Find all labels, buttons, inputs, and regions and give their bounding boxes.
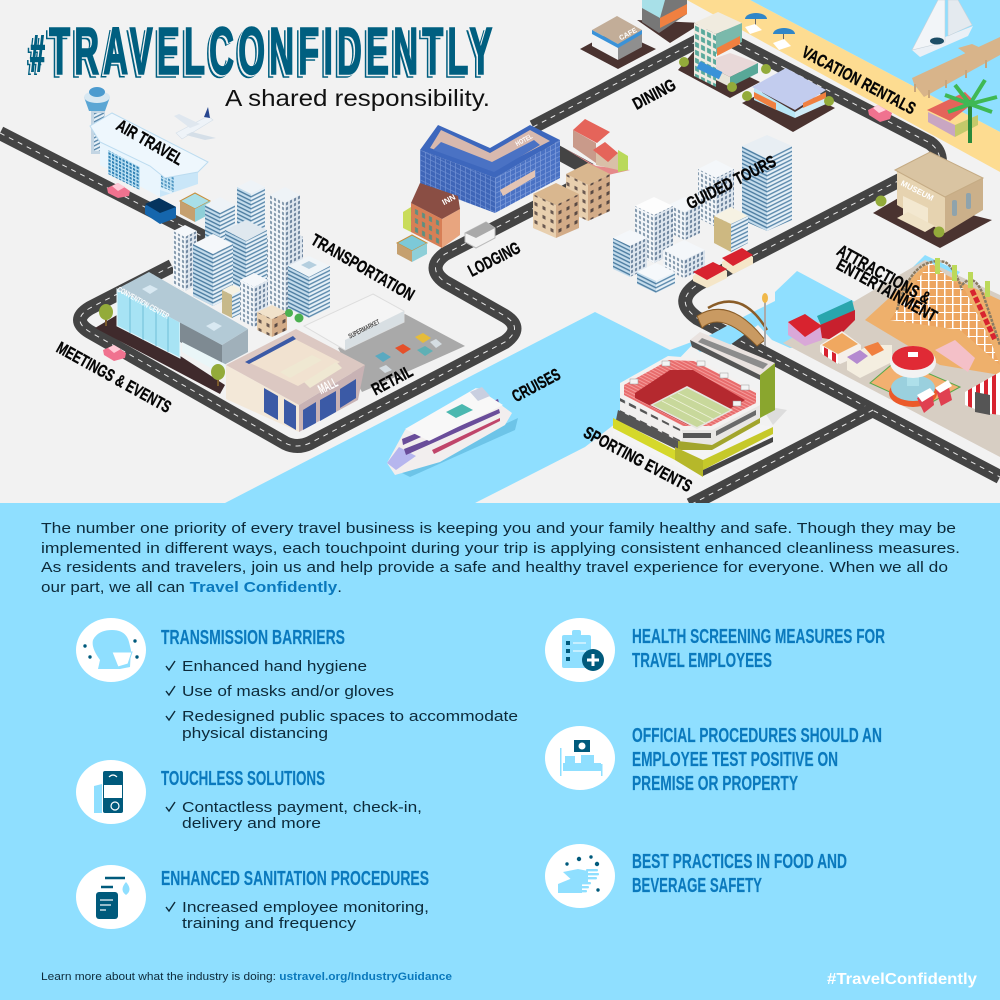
check item xyxy=(166,899,429,932)
label: attractions: ATTRACTIONS & xyxy=(834,241,934,308)
cruise ship xyxy=(387,387,518,477)
label: meetings and events: MEETINGS & EVENTS xyxy=(53,338,174,417)
beach hotel xyxy=(742,68,835,132)
red house xyxy=(564,119,630,175)
inn right xyxy=(442,209,460,248)
bow xyxy=(387,447,416,470)
pink car on loop road xyxy=(103,345,126,361)
tower E xyxy=(225,220,267,290)
bridge xyxy=(697,293,768,346)
rounded block xyxy=(663,240,705,278)
check item: Contactless payment, check-in, xyxy=(182,799,422,816)
air terminal xyxy=(84,87,216,197)
heading xyxy=(632,725,882,795)
airplane xyxy=(174,107,216,140)
label: retail: RETAIL xyxy=(368,362,416,399)
water: harbour lower xyxy=(400,340,697,503)
dark lower wall xyxy=(616,410,678,450)
yellow band right xyxy=(703,427,773,470)
label: lodging: LODGING xyxy=(465,238,523,281)
front tan building xyxy=(533,183,579,238)
tall tower xyxy=(267,187,303,312)
lamp post xyxy=(762,293,768,346)
check item 3: physical distancing xyxy=(182,725,328,742)
tower C xyxy=(205,197,235,247)
parked cars xyxy=(375,333,442,373)
supermarket front xyxy=(345,311,404,350)
house annex roof xyxy=(593,142,618,162)
intro paragraph: As residents and travelers, join us and help provide a safe and healthy travel experience for everyone. When we all do xyxy=(41,559,948,576)
roof xyxy=(117,272,248,345)
field xyxy=(653,388,730,427)
heading: TOUCHLESS SOLUTIONS xyxy=(161,768,325,790)
left wall xyxy=(226,365,299,432)
wall window strip xyxy=(683,433,711,438)
hotel left wall xyxy=(420,150,495,213)
lower bowl xyxy=(635,370,745,425)
check item: Increased employee monitoring, xyxy=(182,899,429,916)
section: touchless solutions xyxy=(76,760,422,832)
mid block xyxy=(670,197,700,240)
funnel xyxy=(470,387,490,401)
hull xyxy=(387,388,512,475)
icon: washing hands xyxy=(545,844,615,908)
tower A xyxy=(173,225,197,291)
tower D xyxy=(237,180,265,240)
heading: ENHANCED SANITATION PROCEDURES xyxy=(161,868,429,890)
inn xyxy=(403,183,460,248)
flat block xyxy=(637,263,675,293)
roof xyxy=(226,329,365,405)
water: ocean top right xyxy=(750,0,1000,132)
inn: INN xyxy=(441,192,457,207)
hotel xyxy=(420,125,560,213)
beach xyxy=(687,0,1000,172)
blue bus xyxy=(145,198,176,224)
icon: sanitizer xyxy=(76,865,146,929)
museum xyxy=(873,152,992,248)
blue windows xyxy=(264,379,356,430)
museum left wall xyxy=(897,170,945,233)
sand area xyxy=(865,265,1000,375)
title: TRAVELCONFIDENTLY xyxy=(46,18,493,92)
mall sign: MALL xyxy=(315,374,340,397)
white outer wall left xyxy=(620,398,682,443)
guided tours buildings xyxy=(613,135,792,293)
water: harbour xyxy=(225,312,697,503)
inn side xyxy=(403,207,411,232)
restaurant awning xyxy=(717,36,740,56)
glass mullions xyxy=(130,296,168,352)
title: # xyxy=(28,25,47,84)
wake xyxy=(400,418,518,477)
icon: clipboard xyxy=(545,618,615,682)
light towers xyxy=(630,361,749,406)
intro paragraph xyxy=(41,520,960,596)
carts xyxy=(917,380,952,413)
shop top xyxy=(637,0,702,43)
terminal building xyxy=(90,113,208,197)
green block xyxy=(675,447,703,477)
white outer wall right xyxy=(682,405,760,445)
tour buses xyxy=(693,248,753,288)
pink car on coast road xyxy=(868,105,892,122)
striped tent xyxy=(965,372,1000,415)
tan rounded buildings xyxy=(533,163,610,238)
section: official procedures xyxy=(545,725,882,795)
house plinth xyxy=(564,148,630,175)
house wall xyxy=(573,130,596,163)
red deck stripe xyxy=(432,418,500,454)
grey face xyxy=(180,322,222,364)
footer hashtag: #TravelConfidently xyxy=(827,971,977,988)
icon: payment terminal xyxy=(76,760,146,824)
label: dining: DINING xyxy=(629,75,679,114)
heading xyxy=(632,626,885,672)
roof vents xyxy=(142,285,222,331)
tower H xyxy=(222,285,242,318)
coaster rails xyxy=(897,261,1000,345)
tower F xyxy=(288,256,330,318)
section: enhanced sanitation procedures xyxy=(76,865,429,932)
restaurant tower xyxy=(694,12,742,87)
beach house xyxy=(927,92,978,137)
subtitle: A shared responsibility. xyxy=(225,85,490,111)
pool pavilion xyxy=(397,235,427,262)
section: food safety xyxy=(545,844,847,908)
coaster lattice xyxy=(890,262,1000,365)
back tan building xyxy=(566,163,610,221)
labels xyxy=(53,42,941,496)
corner block xyxy=(613,230,647,277)
heading: TRANSMISSION BARRIERS xyxy=(161,627,345,649)
top deck xyxy=(405,388,503,441)
house garden xyxy=(618,150,628,172)
stadium xyxy=(613,332,787,480)
supermarket xyxy=(304,294,404,350)
stadium base xyxy=(613,410,773,480)
pink booths xyxy=(935,340,975,372)
check item 1: Enhanced hand hygiene xyxy=(182,658,367,675)
cafe: CAFE xyxy=(618,27,639,42)
glass pavilion xyxy=(180,193,210,222)
restaurant sign xyxy=(696,61,722,79)
white tower xyxy=(635,197,673,263)
city skyline xyxy=(173,180,330,337)
tower G xyxy=(240,273,268,327)
convention sign: CONVENTION CENTER xyxy=(116,285,171,321)
restaurant lower wing xyxy=(702,53,758,87)
convention center xyxy=(95,272,248,394)
plaza xyxy=(95,315,225,394)
tree right xyxy=(211,364,225,386)
heading: BEVERAGE SAFETY xyxy=(632,875,762,897)
cafe xyxy=(580,16,656,69)
title: # xyxy=(30,23,49,82)
footer link text: Learn more about what the industry is doing: ustravel.org/IndustryGuidance xyxy=(41,971,452,983)
title: TRAVELCONFIDENTLY xyxy=(47,17,495,91)
check item 3: Redesigned public spaces to accommodate xyxy=(182,708,518,725)
cafe building xyxy=(592,32,618,60)
carousel xyxy=(889,346,937,407)
upper seats xyxy=(624,360,756,426)
field border xyxy=(650,386,733,429)
museum portico xyxy=(903,196,928,230)
museum right wall xyxy=(945,178,983,233)
green tower xyxy=(760,363,775,418)
orange stand xyxy=(820,331,861,364)
hotel sign: HOTEL xyxy=(515,133,534,148)
mall xyxy=(226,329,365,432)
roads xyxy=(0,32,1000,505)
label: sporting events: SPORTING EVENTS xyxy=(580,423,695,496)
teal bus ride xyxy=(817,300,855,328)
museum arched windows xyxy=(952,193,971,216)
palm trees xyxy=(945,80,997,143)
right wall windows xyxy=(716,410,756,436)
glass face xyxy=(117,289,180,358)
restaurant xyxy=(678,12,771,98)
sailboat xyxy=(912,0,973,57)
section: transmission barriers xyxy=(76,618,518,742)
inn front xyxy=(411,203,442,248)
pink car on airport road xyxy=(107,183,130,198)
check item 2: Use of masks and/or gloves xyxy=(182,683,394,700)
end face xyxy=(222,329,248,366)
pier xyxy=(912,37,1000,98)
lower white bay xyxy=(182,342,225,376)
right lower green xyxy=(678,418,760,450)
water: channel under bridge xyxy=(692,255,960,352)
heading: TRAVEL EMPLOYEES xyxy=(632,650,772,672)
check item: training and frequency xyxy=(182,915,357,932)
ring base xyxy=(620,356,760,430)
house main roof xyxy=(573,119,610,143)
hotel right wall xyxy=(495,140,560,213)
title: # xyxy=(27,26,46,85)
heading: EMPLOYEE TEST POSITIVE ON xyxy=(632,749,838,771)
intro paragraph: our part, we all can Travel Confidently . xyxy=(41,579,342,596)
right wall xyxy=(299,365,365,432)
check item: delivery and more xyxy=(182,815,321,832)
heading xyxy=(632,851,847,897)
park ground xyxy=(783,260,1000,457)
section: health screening xyxy=(545,618,885,682)
check item 3 xyxy=(166,708,518,742)
label: cruises: CRUISES xyxy=(509,365,564,406)
scoreboard roof xyxy=(690,332,775,380)
label: transportation: TRANSPORTATION xyxy=(308,230,418,305)
label: entertainment: ENTERTAINMENT xyxy=(833,255,941,326)
intro paragraph: The number one priority of every travel business is keeping you and your family healthy and safe. Though they may be xyxy=(41,520,956,537)
red food stand xyxy=(788,315,822,346)
stadium shadow xyxy=(760,405,787,425)
museum steps xyxy=(897,212,935,232)
museum roof xyxy=(895,152,983,197)
check item xyxy=(166,799,422,832)
info panel background xyxy=(0,503,1000,1000)
tree left xyxy=(99,304,113,326)
hotel balcony xyxy=(500,170,535,196)
heading: HEALTH SCREENING MEASURES FOR xyxy=(632,626,885,648)
heading: OFFICIAL PROCEDURES SHOULD AN xyxy=(632,725,882,747)
map background xyxy=(0,0,1000,503)
trees xyxy=(679,57,771,92)
intro paragraph: implemented in different ways, each touchpoint during your trip is applying consistent enhanced cleanliness measures. xyxy=(41,540,960,557)
street trees xyxy=(285,309,304,322)
green pylons xyxy=(935,258,990,297)
amusement park xyxy=(783,258,1000,457)
window tower xyxy=(698,160,734,227)
beach umbrellas xyxy=(745,13,795,50)
tower B xyxy=(193,234,233,306)
yellow band left xyxy=(613,418,675,460)
heading: BEST PRACTICES IN FOOD AND xyxy=(632,851,847,873)
museum sign: MUSEUM xyxy=(899,179,935,203)
retail lot xyxy=(304,294,465,392)
title: TRAVELCONFIDENTLY xyxy=(49,15,496,89)
decks xyxy=(402,399,500,455)
tall striped tower xyxy=(742,135,792,231)
coaster cars xyxy=(972,290,995,340)
label: guided tours: GUIDED TOURS xyxy=(683,152,779,213)
control tower xyxy=(84,87,110,154)
house annex xyxy=(596,150,618,170)
label: vacation rentals: VACATION RENTALS xyxy=(799,42,919,118)
cafe roof xyxy=(592,16,642,44)
inn roof xyxy=(411,183,460,219)
small tan block xyxy=(257,305,287,337)
icon: bed xyxy=(545,726,615,790)
colored stalls xyxy=(847,342,892,378)
van xyxy=(465,222,495,248)
tan tower xyxy=(714,207,748,252)
carousel sand xyxy=(870,360,960,407)
hotel roof xyxy=(420,125,560,178)
pool xyxy=(446,404,473,418)
supermarket sign: SUPERMARKET xyxy=(348,319,381,340)
icon: mask xyxy=(76,618,146,682)
label: air travel: AIR TRAVEL xyxy=(113,116,187,169)
roof skylight xyxy=(245,336,342,388)
heading: PREMISE OR PROPERTY xyxy=(632,773,798,795)
